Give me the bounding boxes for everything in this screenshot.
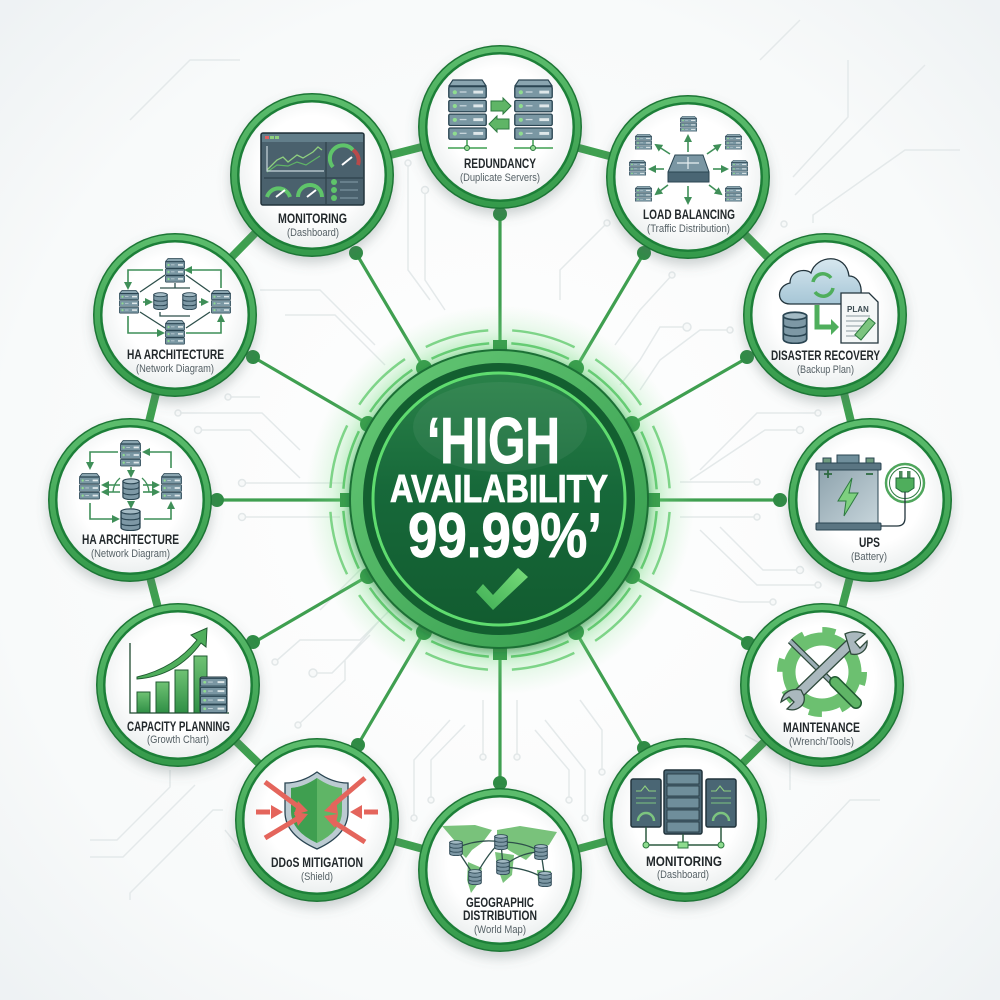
title text <box>390 404 608 571</box>
label: Capacity Planning: (Growth Chart) <box>147 734 209 746</box>
icon: network diagram <box>119 258 231 344</box>
label: HA Architecture: (Network Diagram) <box>91 548 170 560</box>
panel: DDoS Mitigation <box>235 738 399 902</box>
label: UPS: (Battery) <box>851 551 887 563</box>
circuit board trace background <box>90 20 960 900</box>
outer ring connectors between nodes <box>130 127 870 870</box>
panel: Geographic Distribution <box>418 788 582 952</box>
label: HA Architecture <box>127 347 224 375</box>
label: Maintenance: MAINTENANCE <box>783 720 860 735</box>
label: Monitoring: (Dashboard) <box>287 227 339 239</box>
icon: world map network <box>442 825 557 893</box>
icon: duplicate servers <box>448 80 553 150</box>
label: Geographic Distribution: DISTRIBUTION <box>463 908 537 923</box>
label: Maintenance: (Wrench/Tools) <box>789 736 854 748</box>
icon: check mark <box>476 568 528 610</box>
label: Capacity Planning <box>127 719 230 746</box>
label: Load Balancing: LOAD BALANCING <box>643 207 735 222</box>
label: DDoS Mitigation: (Shield) <box>301 871 333 883</box>
label: HA Architecture: HA ARCHITECTURE <box>127 347 224 362</box>
title text: 99.99%’ <box>408 501 602 571</box>
panel: Monitoring dashboard <box>230 93 394 257</box>
spokes from hub to nodes <box>210 207 787 790</box>
label: Redundancy: REDUNDANCY <box>464 156 536 171</box>
label: HA Architecture: (Network Diagram) <box>136 363 214 375</box>
panel: UPS <box>788 418 952 582</box>
panel: Disaster Recovery <box>743 233 907 397</box>
icon: load balancer <box>629 116 748 203</box>
label: Monitoring <box>646 854 722 881</box>
title text: ‘HIGH <box>427 404 560 477</box>
label: Monitoring <box>278 211 347 239</box>
label: Monitoring: (Dashboard) <box>657 869 709 881</box>
label: Monitoring: MONITORING <box>646 854 722 869</box>
icon: gear, wrench and screwdriver <box>781 631 867 713</box>
panel: Capacity Planning <box>96 603 260 767</box>
label: DDoS Mitigation: DDoS MITIGATION <box>271 855 363 870</box>
label: Disaster Recovery: (Backup Plan) <box>797 364 854 376</box>
label: Capacity Planning: CAPACITY PLANNING <box>127 719 230 734</box>
label: Geographic Distribution <box>463 895 537 936</box>
icon: cloud, database and plan: PLAN <box>847 305 869 314</box>
label: Disaster Recovery: DISASTER RECOVERY <box>771 348 880 363</box>
label: Load Balancing <box>643 207 735 235</box>
label: Maintenance <box>783 720 860 748</box>
panel: Load Balancing <box>606 95 770 259</box>
label: DDoS Mitigation <box>271 855 363 883</box>
icon: server dashboards <box>631 770 736 848</box>
label: Monitoring: MONITORING <box>278 211 347 226</box>
label: Redundancy <box>460 156 540 184</box>
icon: battery and plug <box>816 455 924 530</box>
label: HA Architecture: HA ARCHITECTURE <box>82 532 179 547</box>
label: Redundancy: (Duplicate Servers) <box>460 172 540 184</box>
panel: Monitoring servers <box>603 738 767 902</box>
panel: Maintenance <box>740 603 904 767</box>
label: Geographic Distribution: GEOGRAPHIC <box>466 895 534 910</box>
icon: shield and attack arrows <box>256 772 378 849</box>
label: UPS: UPS <box>859 535 880 550</box>
icon: dashboard <box>261 133 364 205</box>
icon: network diagram <box>79 441 182 531</box>
label: Disaster Recovery <box>771 348 880 376</box>
icon: cloud, database and plan <box>780 259 878 343</box>
label: UPS <box>851 535 887 563</box>
label: HA Architecture <box>82 532 179 560</box>
panel: HA Architecture (lower) <box>48 418 212 582</box>
panel: Redundancy <box>418 45 582 209</box>
panel: HA Architecture (upper) <box>93 233 257 397</box>
label: Geographic Distribution: (World Map) <box>474 924 526 936</box>
central hub <box>305 305 695 695</box>
label: Load Balancing: (Traffic Distribution) <box>647 223 730 235</box>
icon: growth chart <box>130 628 229 713</box>
title text: AVAILABILITY <box>390 468 608 511</box>
